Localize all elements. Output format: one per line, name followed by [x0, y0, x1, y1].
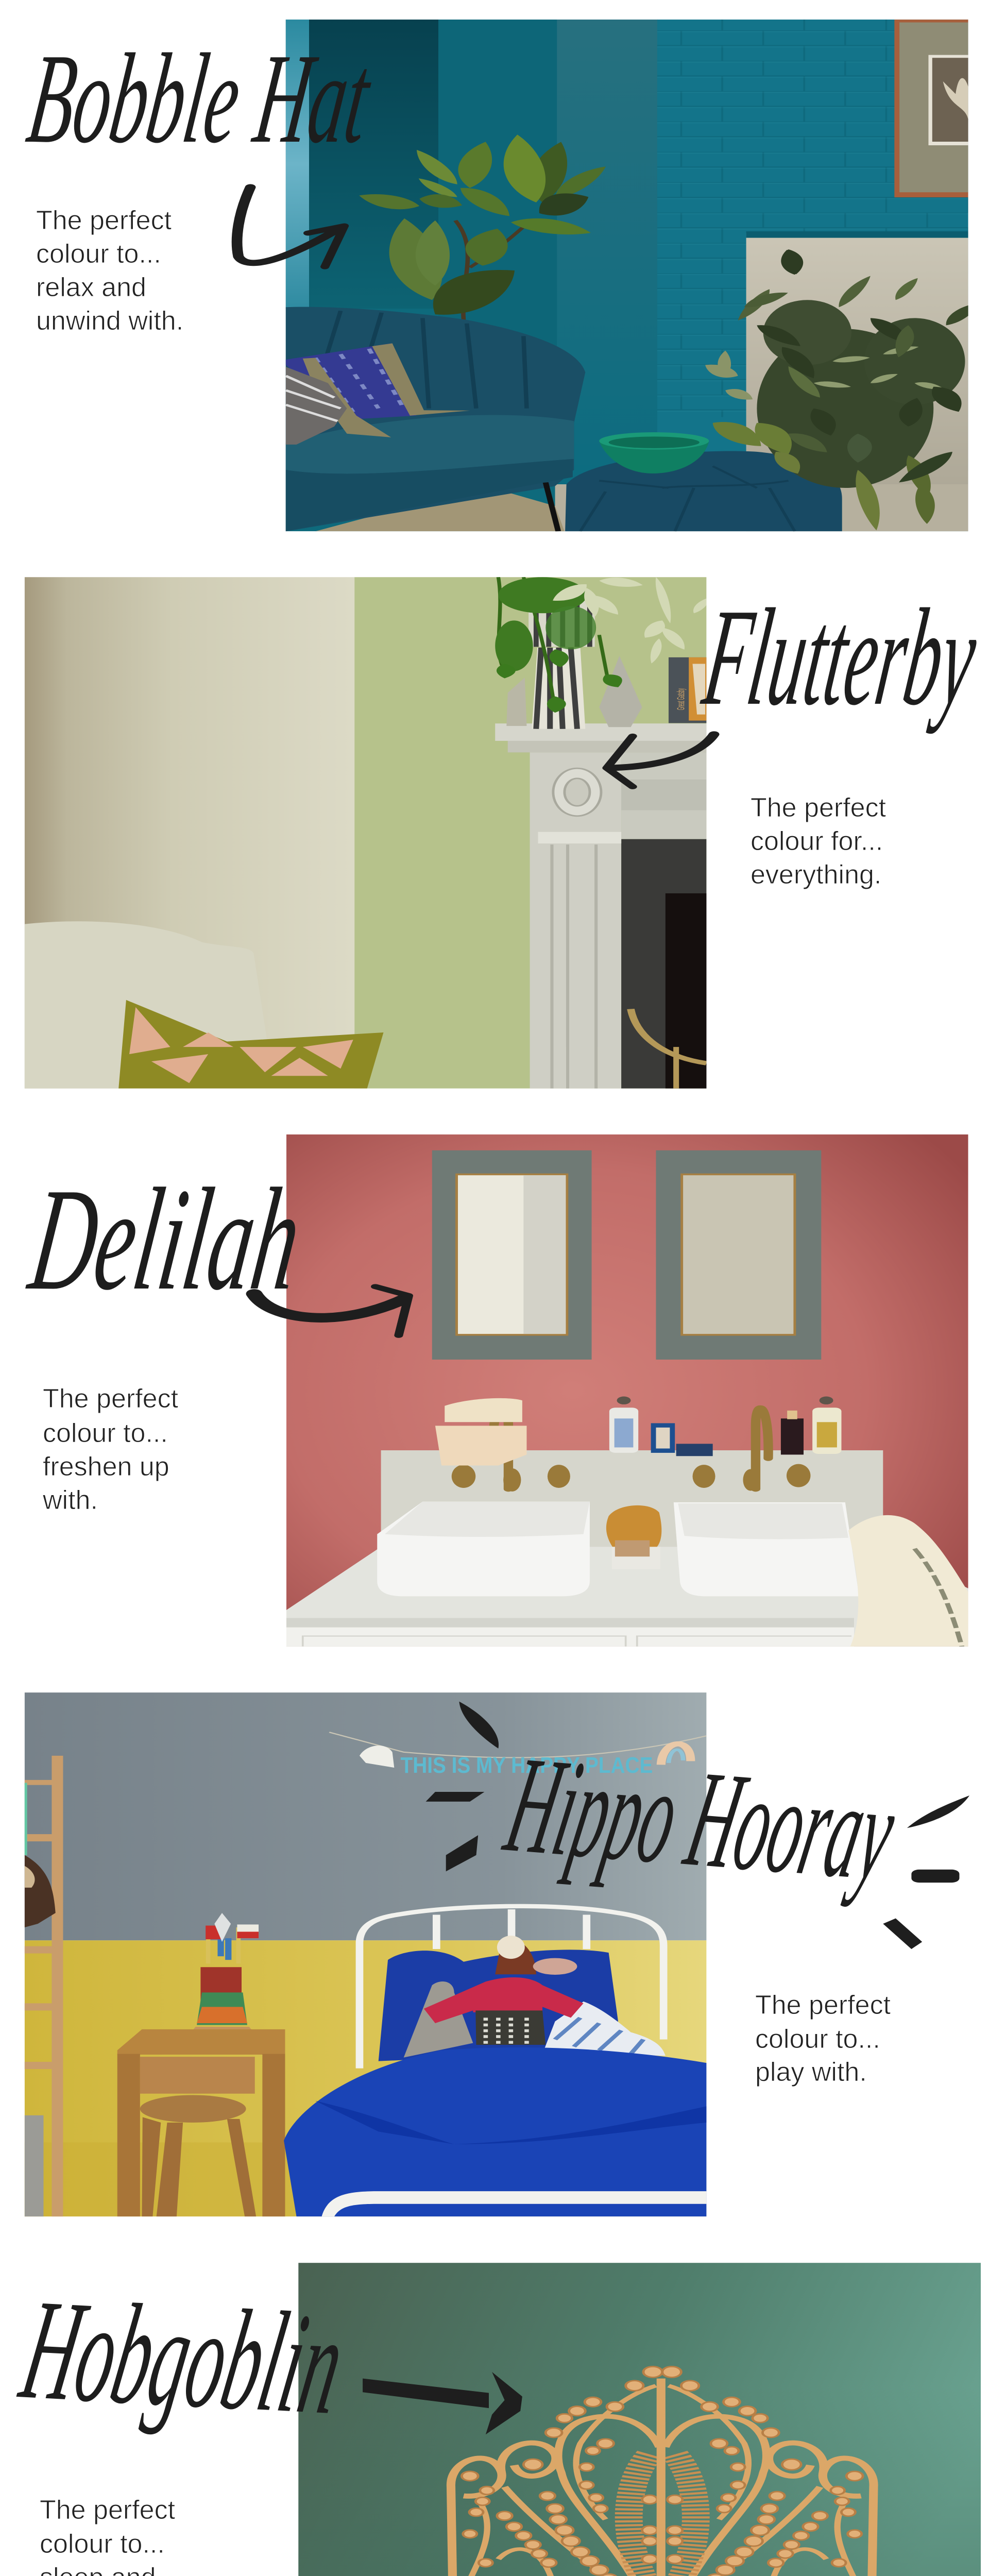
text block: The perfect — [40, 2495, 176, 2525]
pillows — [379, 1950, 666, 2061]
text block: colour for... — [751, 826, 883, 856]
text block: colour to... — [43, 1418, 168, 1448]
cushions — [286, 343, 470, 445]
title: Bobble Hat: Bobble Hat — [20, 27, 379, 170]
text block: freshen up — [43, 1452, 169, 1482]
panel: Bobble Hat — [20, 20, 968, 532]
arrow — [237, 187, 345, 267]
arrow — [254, 1286, 408, 1335]
text block: with. — [42, 1485, 98, 1515]
picture frame — [894, 20, 968, 197]
foliage — [700, 248, 983, 531]
arrow — [363, 2372, 522, 2434]
photo: teal living room — [286, 20, 983, 531]
headboard — [451, 2366, 902, 2576]
photo: green bedroom with rattan headboard — [298, 2263, 981, 2576]
basins — [377, 1502, 859, 1596]
ladder — [25, 1756, 63, 2216]
panel: Delilah — [21, 1134, 968, 1647]
mirrors — [455, 1174, 796, 1336]
text block: unwind with. — [36, 306, 183, 336]
text block: The perfect — [751, 793, 886, 823]
mantel objects — [506, 601, 706, 729]
panel: Flutterby — [25, 577, 986, 1089]
burst marks — [426, 1702, 969, 1949]
counter — [286, 1450, 968, 1647]
stuffed toy — [424, 1936, 584, 2045]
text block: everything. — [751, 860, 881, 890]
fireplace — [495, 723, 706, 1089]
arrow — [607, 734, 714, 787]
armchair — [25, 921, 268, 1089]
banner — [329, 1732, 706, 1778]
toy cathedral — [183, 1913, 262, 2043]
text block: The perfect — [43, 1384, 179, 1414]
text block: colour to... — [36, 239, 161, 269]
text block: play with. — [755, 2057, 867, 2087]
folded towels — [435, 1398, 526, 1465]
title: Hobgoblin: Hobgoblin — [10, 2269, 355, 2445]
plant — [355, 133, 612, 325]
stool — [140, 2095, 256, 2216]
bottles — [609, 1396, 841, 1456]
pouffe — [565, 451, 842, 531]
panel: Hobgoblin — [0, 2251, 989, 2576]
mantel objects: Great Gatsby — [675, 688, 687, 710]
panel: Hippo Hooray — [0, 1674, 989, 2251]
sofa — [286, 307, 585, 531]
hanging towel — [848, 1515, 968, 1647]
photo: pink bathroom — [286, 1134, 968, 1647]
text block: The perfect — [755, 1990, 891, 2020]
bed frame — [360, 1906, 663, 2069]
photo: child's bedroom — [25, 1692, 706, 2216]
text block: relax and — [36, 273, 146, 302]
sponge and brush — [606, 1505, 661, 1569]
title: Delilah: Delilah — [21, 1158, 310, 1320]
grey panels — [432, 1150, 821, 1360]
cushion — [118, 1000, 383, 1089]
text block: The perfect — [36, 206, 172, 235]
text block: colour to... — [40, 2529, 165, 2559]
hanging plants — [495, 576, 713, 713]
bowl — [599, 432, 709, 473]
text block: colour to... — [755, 2024, 880, 2054]
duvet — [284, 2047, 706, 2216]
rug and floor — [555, 484, 968, 531]
foot rail — [321, 2191, 706, 2216]
photo: green wall with fireplace — [25, 576, 713, 1089]
banner: THIS IS MY HAPPY PLACE — [401, 1753, 653, 1778]
bedside table — [117, 2029, 285, 2216]
taps — [452, 1408, 810, 1492]
